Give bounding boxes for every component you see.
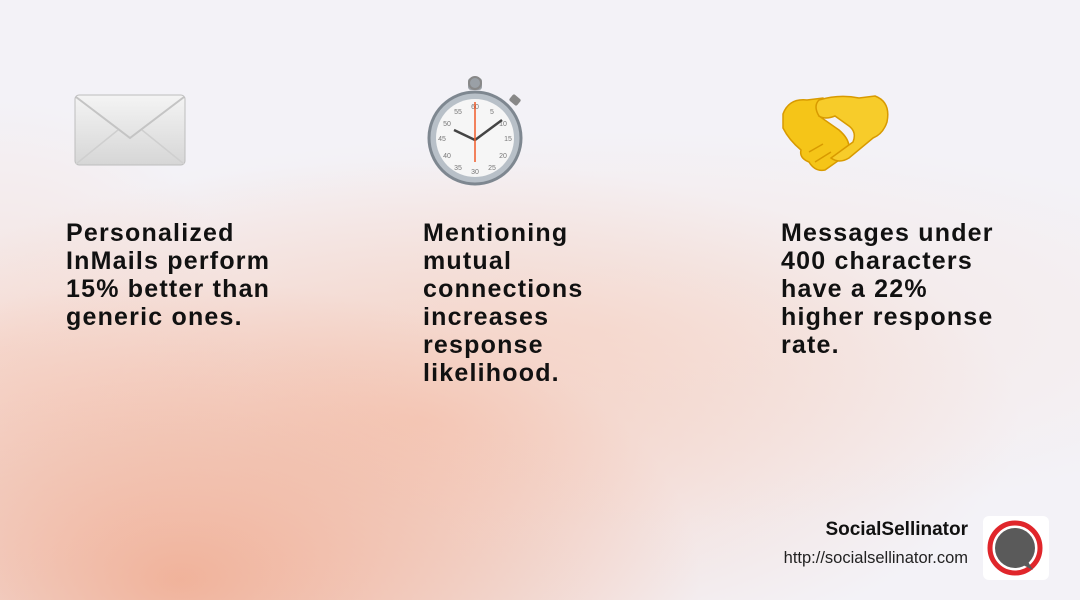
icon: stopwatch: 25 [488,165,496,172]
text: messages under 400 characters: 400 characters [781,247,973,275]
text: mutual connections [423,219,583,387]
icon: stopwatch: 30 [471,169,479,176]
icon: stopwatch: 45 [438,136,446,143]
text: mutual connections: response [423,331,544,359]
icon: stopwatch: 50 [443,121,451,128]
brand name: SocialSellinator [825,519,968,540]
text: personalized inmails: 15% better than [66,275,270,303]
text: mutual connections: Mentioning [423,219,568,247]
icon: stopwatch: 10 [499,121,507,128]
text: personalized inmails: generic ones. [66,303,243,331]
text: personalized inmails: InMails perform [66,247,270,275]
text: mutual connections: connections [423,275,583,303]
text: messages under 400 characters: have a 22% [781,275,928,303]
brand url: http://socialsellinator.com [784,549,968,567]
text: messages under 400 characters: higher response [781,303,994,331]
icon: handshake [782,95,889,172]
text: messages under 400 characters: Messages under [781,219,994,247]
text: mutual connections: likelihood. [423,359,560,387]
icon: stopwatch: 55 [454,109,462,116]
logo [983,516,1049,580]
icon: stopwatch: 20 [499,153,507,160]
text: mutual connections: increases [423,303,549,331]
text: messages under 400 characters [781,219,994,359]
icon: stopwatch: 5 [490,109,494,116]
icon: stopwatch: 60 [471,104,479,111]
text: personalized inmails: Personalized [66,219,235,247]
text: personalized inmails [66,219,270,331]
icon: stopwatch: 15 [504,136,512,143]
icon: envelope [74,94,186,166]
icon: stopwatch [428,76,522,186]
text: messages under 400 characters: rate. [781,331,840,359]
icon: stopwatch: 40 [443,153,451,160]
text: mutual connections: mutual [423,247,512,275]
icon: stopwatch: 35 [454,165,462,172]
